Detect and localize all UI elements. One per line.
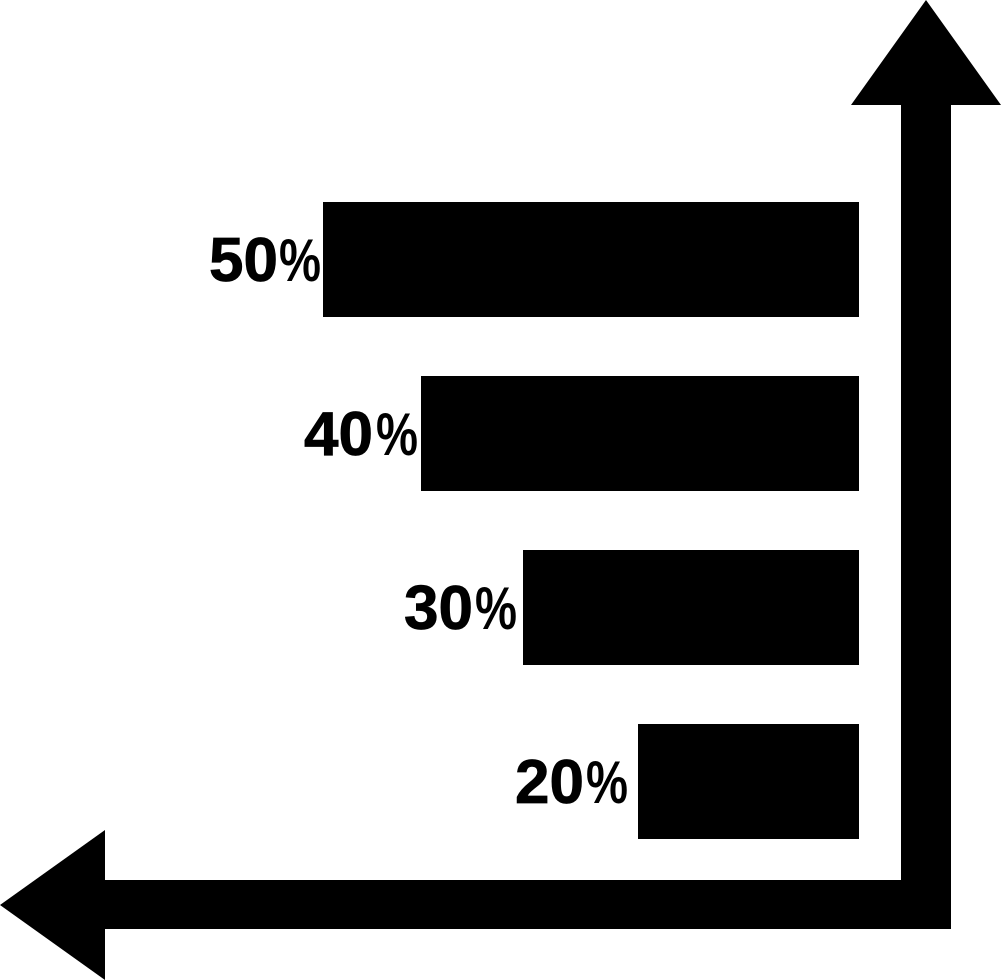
bar: 40% xyxy=(421,376,859,491)
label: 20%: % xyxy=(586,749,628,816)
label: 30%: 30 xyxy=(404,574,473,643)
label: 20% xyxy=(515,748,628,817)
label: 40% xyxy=(304,400,418,469)
label: 30% xyxy=(404,574,517,643)
label: 30%: % xyxy=(475,575,517,642)
bar: 50% xyxy=(323,202,859,317)
bar: 20% xyxy=(638,724,859,839)
label: 50% xyxy=(209,226,321,295)
bar: 30% xyxy=(523,550,859,665)
label: 50%: % xyxy=(279,227,321,294)
label: 50%: 50 xyxy=(209,226,278,295)
label: 40%: 40 xyxy=(304,400,373,469)
label: 40%: % xyxy=(376,401,418,468)
label: 20%: 20 xyxy=(515,748,584,817)
